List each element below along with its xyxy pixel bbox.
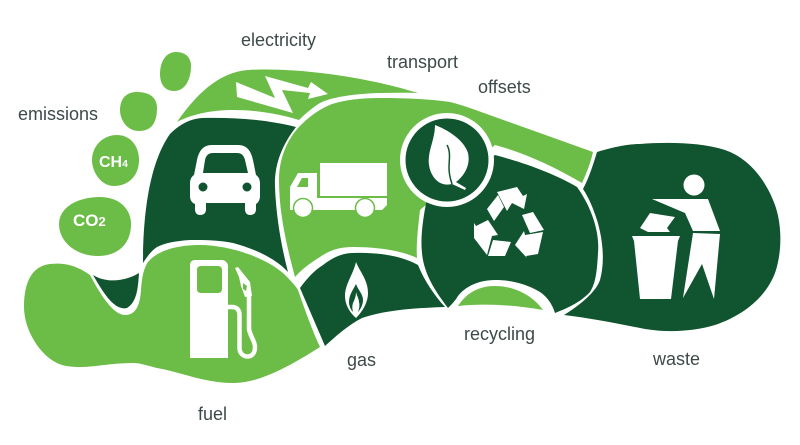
panel: fuel: [24, 245, 320, 383]
label: electricity: electricity: [241, 30, 316, 50]
panel: car: [143, 118, 296, 272]
panel: electricity: [177, 70, 418, 122]
label: fuel: fuel: [198, 404, 227, 424]
icon: leaf badge: [400, 113, 494, 207]
label: waste: waste: [652, 349, 700, 369]
icon: lightning arrow: [236, 76, 328, 113]
panel: waste: [564, 143, 780, 331]
icon: recycling arrows: [474, 187, 544, 258]
panel: transport and offsets band: [279, 98, 593, 277]
toe: second: [120, 92, 157, 131]
icon: fuel pump: [190, 260, 255, 358]
label: recycling: recycling: [464, 324, 535, 344]
panel: small dark arch: [93, 273, 139, 308]
panel: recycling arc: [458, 286, 543, 310]
toe: CH4: CH4: [99, 154, 128, 171]
label: emissions: emissions: [18, 104, 98, 124]
toe: top: [160, 52, 191, 91]
toe: CO2: [59, 197, 131, 256]
panel: gas: [300, 253, 445, 346]
label: gas: gas: [347, 350, 376, 370]
label: offsets: offsets: [478, 77, 531, 97]
icon: truck: [290, 163, 387, 218]
toe: CO2: CO2: [73, 211, 106, 230]
icon: person with bin: [632, 174, 720, 299]
icon: car: [190, 145, 260, 215]
label: transport: transport: [387, 52, 458, 72]
toe: CH4: [92, 135, 139, 186]
icon: flame: [345, 262, 368, 318]
panel: recycling: [421, 155, 598, 313]
